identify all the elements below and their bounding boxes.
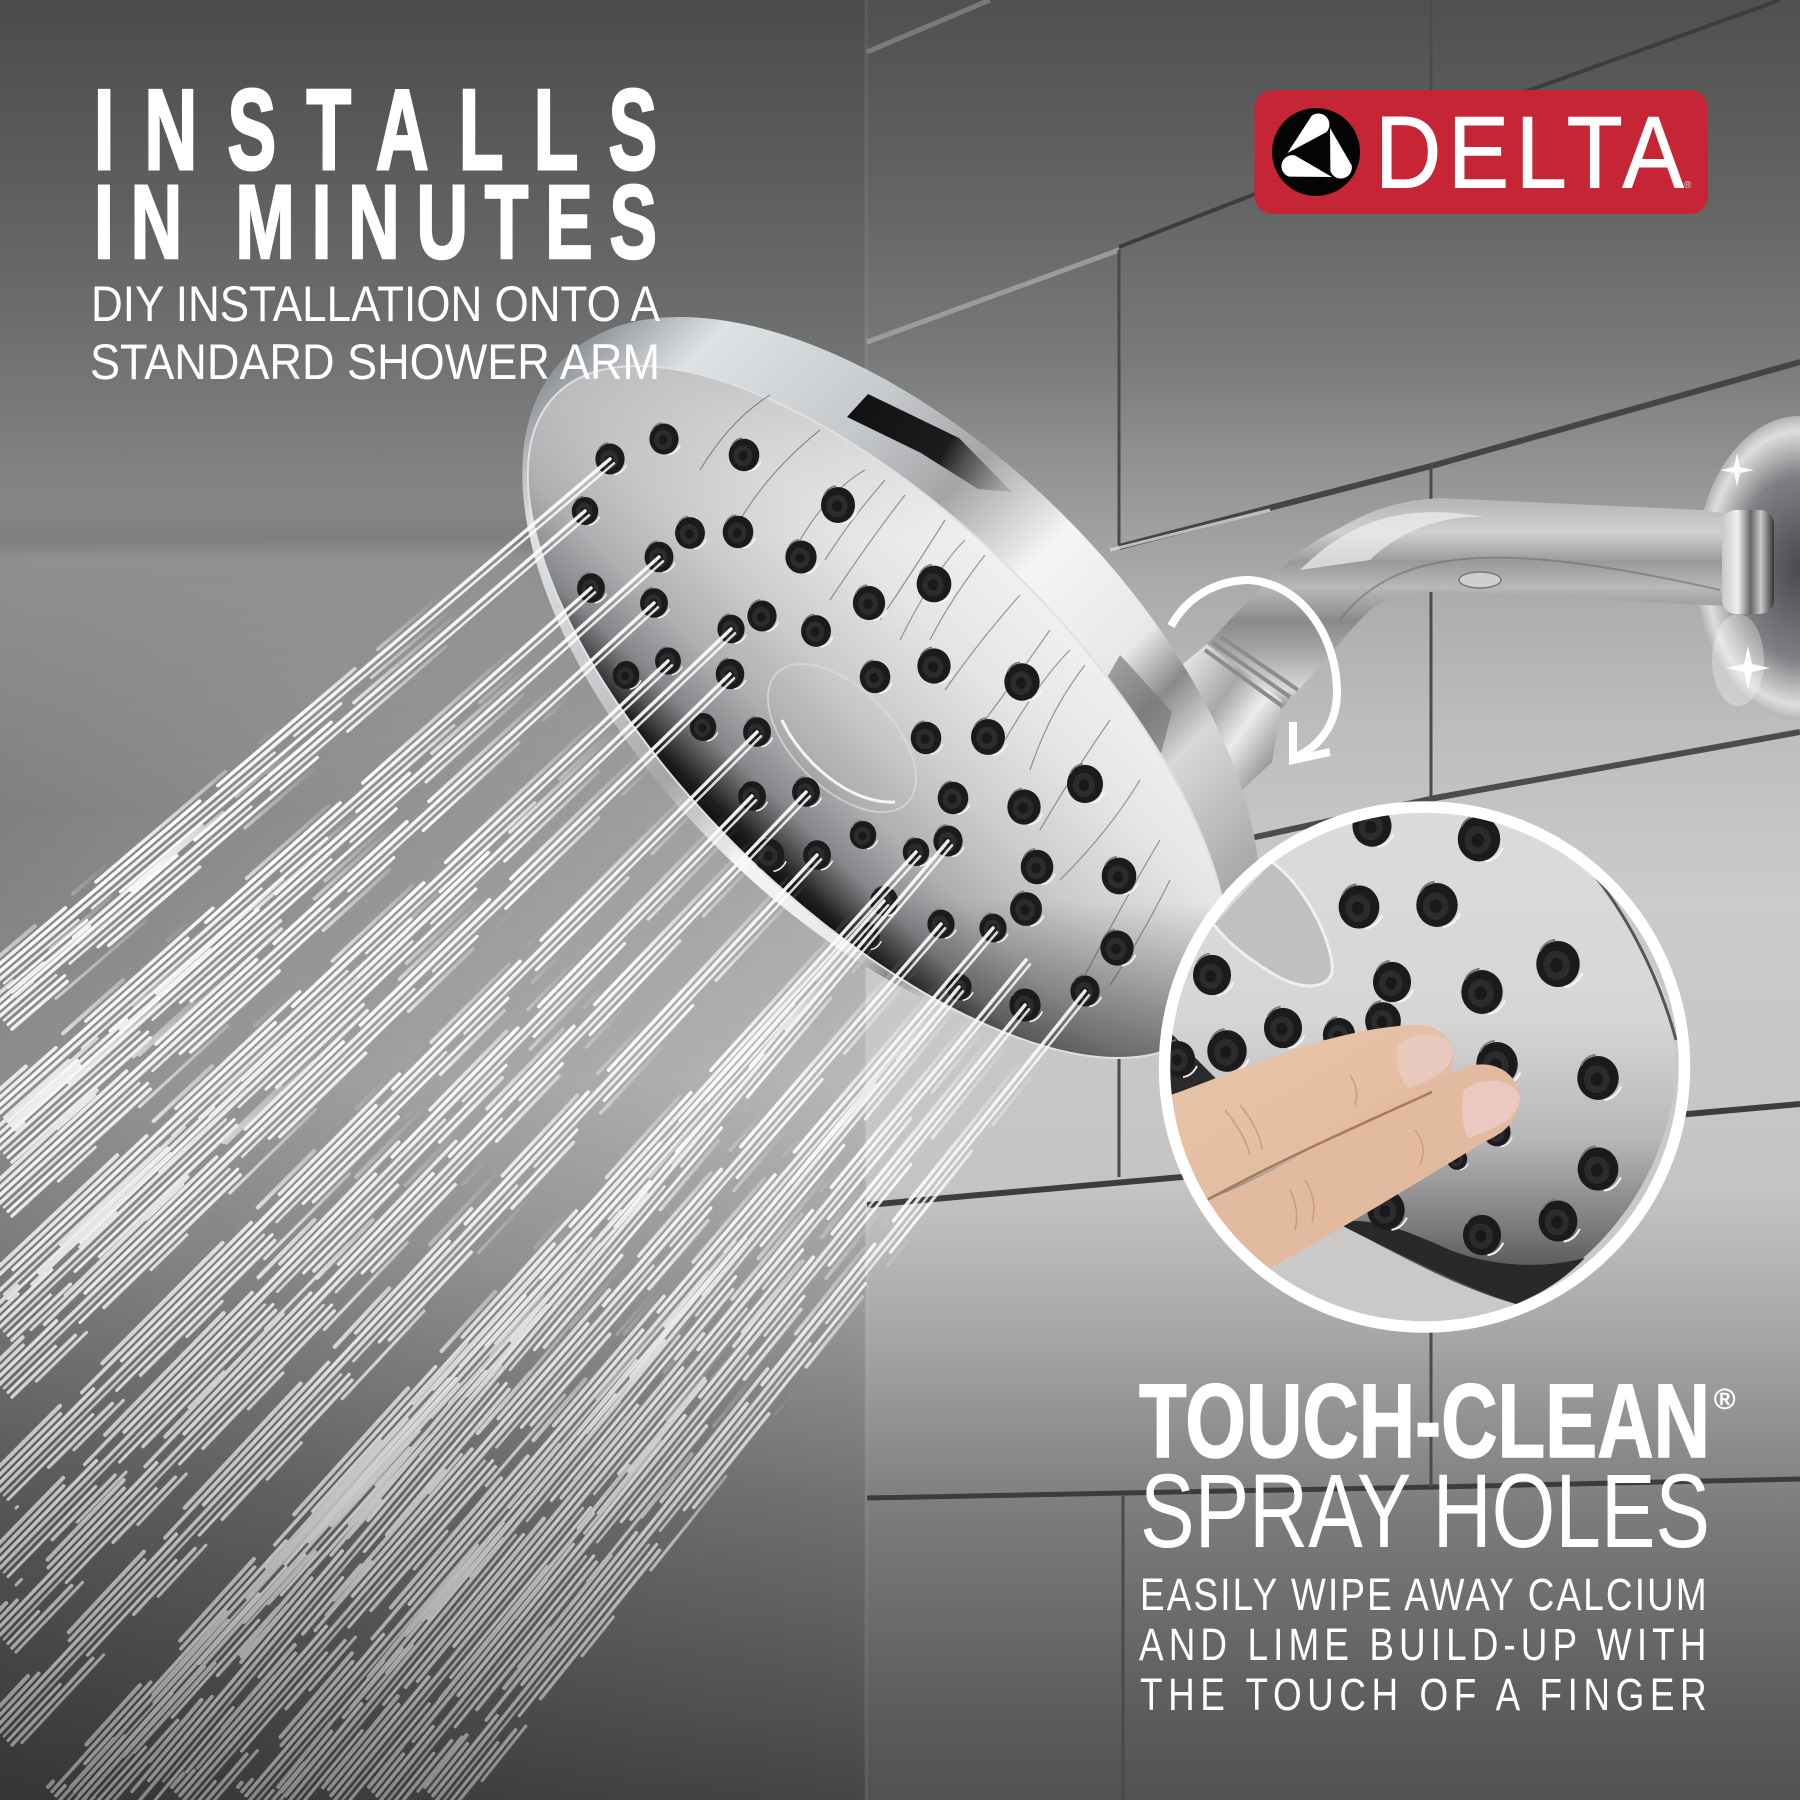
logo registered mark: ® — [1684, 180, 1692, 191]
callout: installs in minutes — [90, 67, 661, 390]
inset dark lower reflection — [1337, 1221, 1585, 1304]
threaded nut — [1178, 637, 1298, 792]
inset face plate — [1150, 785, 1676, 1304]
face plate — [419, 256, 1337, 1168]
shower head — [395, 188, 1387, 1176]
water spray — [0, 446, 1101, 1800]
body line 2: STANDARD SHOWER ARM — [90, 334, 660, 390]
fingernails — [1397, 1034, 1453, 1088]
logo: Delta — [1254, 90, 1708, 214]
wall flange — [1696, 416, 1800, 720]
logo mark: triangle petals — [1272, 108, 1360, 196]
body line 2: AND LIME BUILD-UP WITH — [1139, 1620, 1706, 1670]
inset centre oval — [1214, 862, 1332, 986]
spray nozzles — [572, 423, 1138, 1022]
water trails on face — [700, 395, 1170, 985]
curved arm pipe — [1207, 498, 1727, 711]
heading line 1: INSTALLS — [94, 67, 657, 194]
body line 1: EASILY WIPE AWAY CALCIUM — [1140, 1570, 1707, 1620]
logo wordmark: DELTA — [1375, 95, 1684, 210]
finger creases — [1225, 1075, 1423, 1230]
collar — [1722, 510, 1774, 614]
magnified inset: fingers wiping spray holes — [1150, 785, 1690, 1335]
chrome outer rim — [395, 188, 1387, 1176]
upper finger — [1160, 1025, 1453, 1200]
inset white ring — [1164, 807, 1684, 1327]
rotation arrow — [1171, 580, 1337, 760]
inset spray holes — [1161, 804, 1621, 1255]
heading line 2: IN MINUTES — [94, 164, 657, 281]
arrowhead — [1293, 722, 1330, 760]
rim reflection: dark patch — [847, 394, 1012, 492]
lower finger — [1207, 1064, 1520, 1268]
centre oval — [742, 638, 942, 838]
body line 3: THE TOUCH OF A FINGER — [1140, 1670, 1707, 1720]
callout: touch-clean spray holes — [1139, 1363, 1735, 1720]
shower arm and flange — [1178, 416, 1800, 792]
registered mark: ® — [1714, 1384, 1735, 1416]
body line 1: DIY INSTALLATION ONTO A — [91, 276, 661, 332]
